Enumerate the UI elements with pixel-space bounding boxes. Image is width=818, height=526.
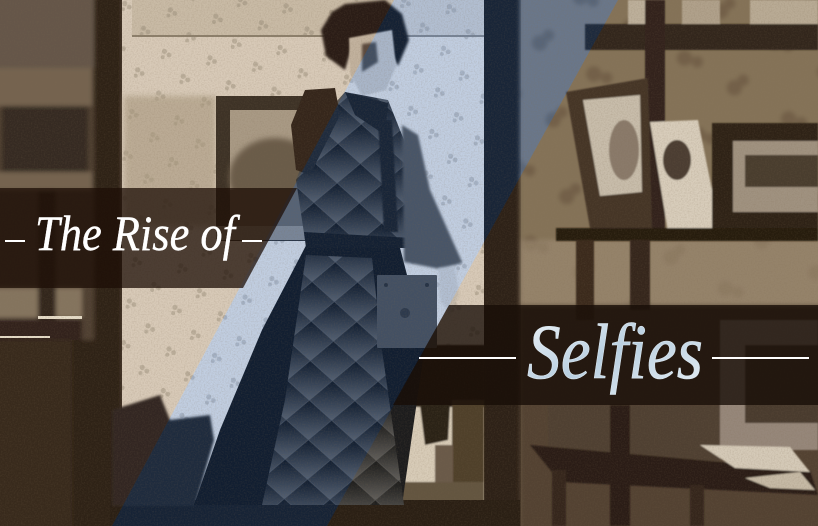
right doorpost [484, 0, 521, 526]
dark banner: The Rise of [0, 188, 297, 288]
right arm [402, 125, 462, 270]
face [349, 30, 396, 96]
right dash [242, 240, 262, 242]
left dash [5, 240, 25, 242]
dark banner: Selfies [393, 305, 818, 405]
heading: Selfies: Selfies [527, 308, 703, 395]
lower right furniture [530, 320, 818, 526]
skirt quilting [262, 255, 404, 505]
right room background [520, 0, 818, 526]
heading: The Rise of: The Rise of [35, 205, 240, 261]
armchair [112, 395, 214, 506]
bodice [296, 92, 418, 240]
box camera [377, 275, 437, 348]
framed picture on wall [216, 96, 321, 241]
skirt [194, 234, 425, 505]
left rule [419, 357, 516, 359]
shelves and photo frames [556, 0, 818, 320]
right rule [712, 357, 809, 359]
woman figure [194, 0, 462, 505]
wallpapered wall [122, 0, 486, 500]
left room background [0, 0, 130, 526]
table and objects beside woman [395, 345, 485, 505]
floor strip [110, 500, 520, 526]
blue diagonal band [112, 0, 618, 526]
hair [321, 0, 409, 70]
bodice front trim [378, 120, 398, 232]
hand [438, 265, 459, 315]
collar [345, 92, 388, 135]
shaded side of face [362, 42, 378, 72]
waist [304, 232, 412, 248]
window glints on left edge [0, 316, 82, 338]
left sleeve [291, 88, 340, 175]
